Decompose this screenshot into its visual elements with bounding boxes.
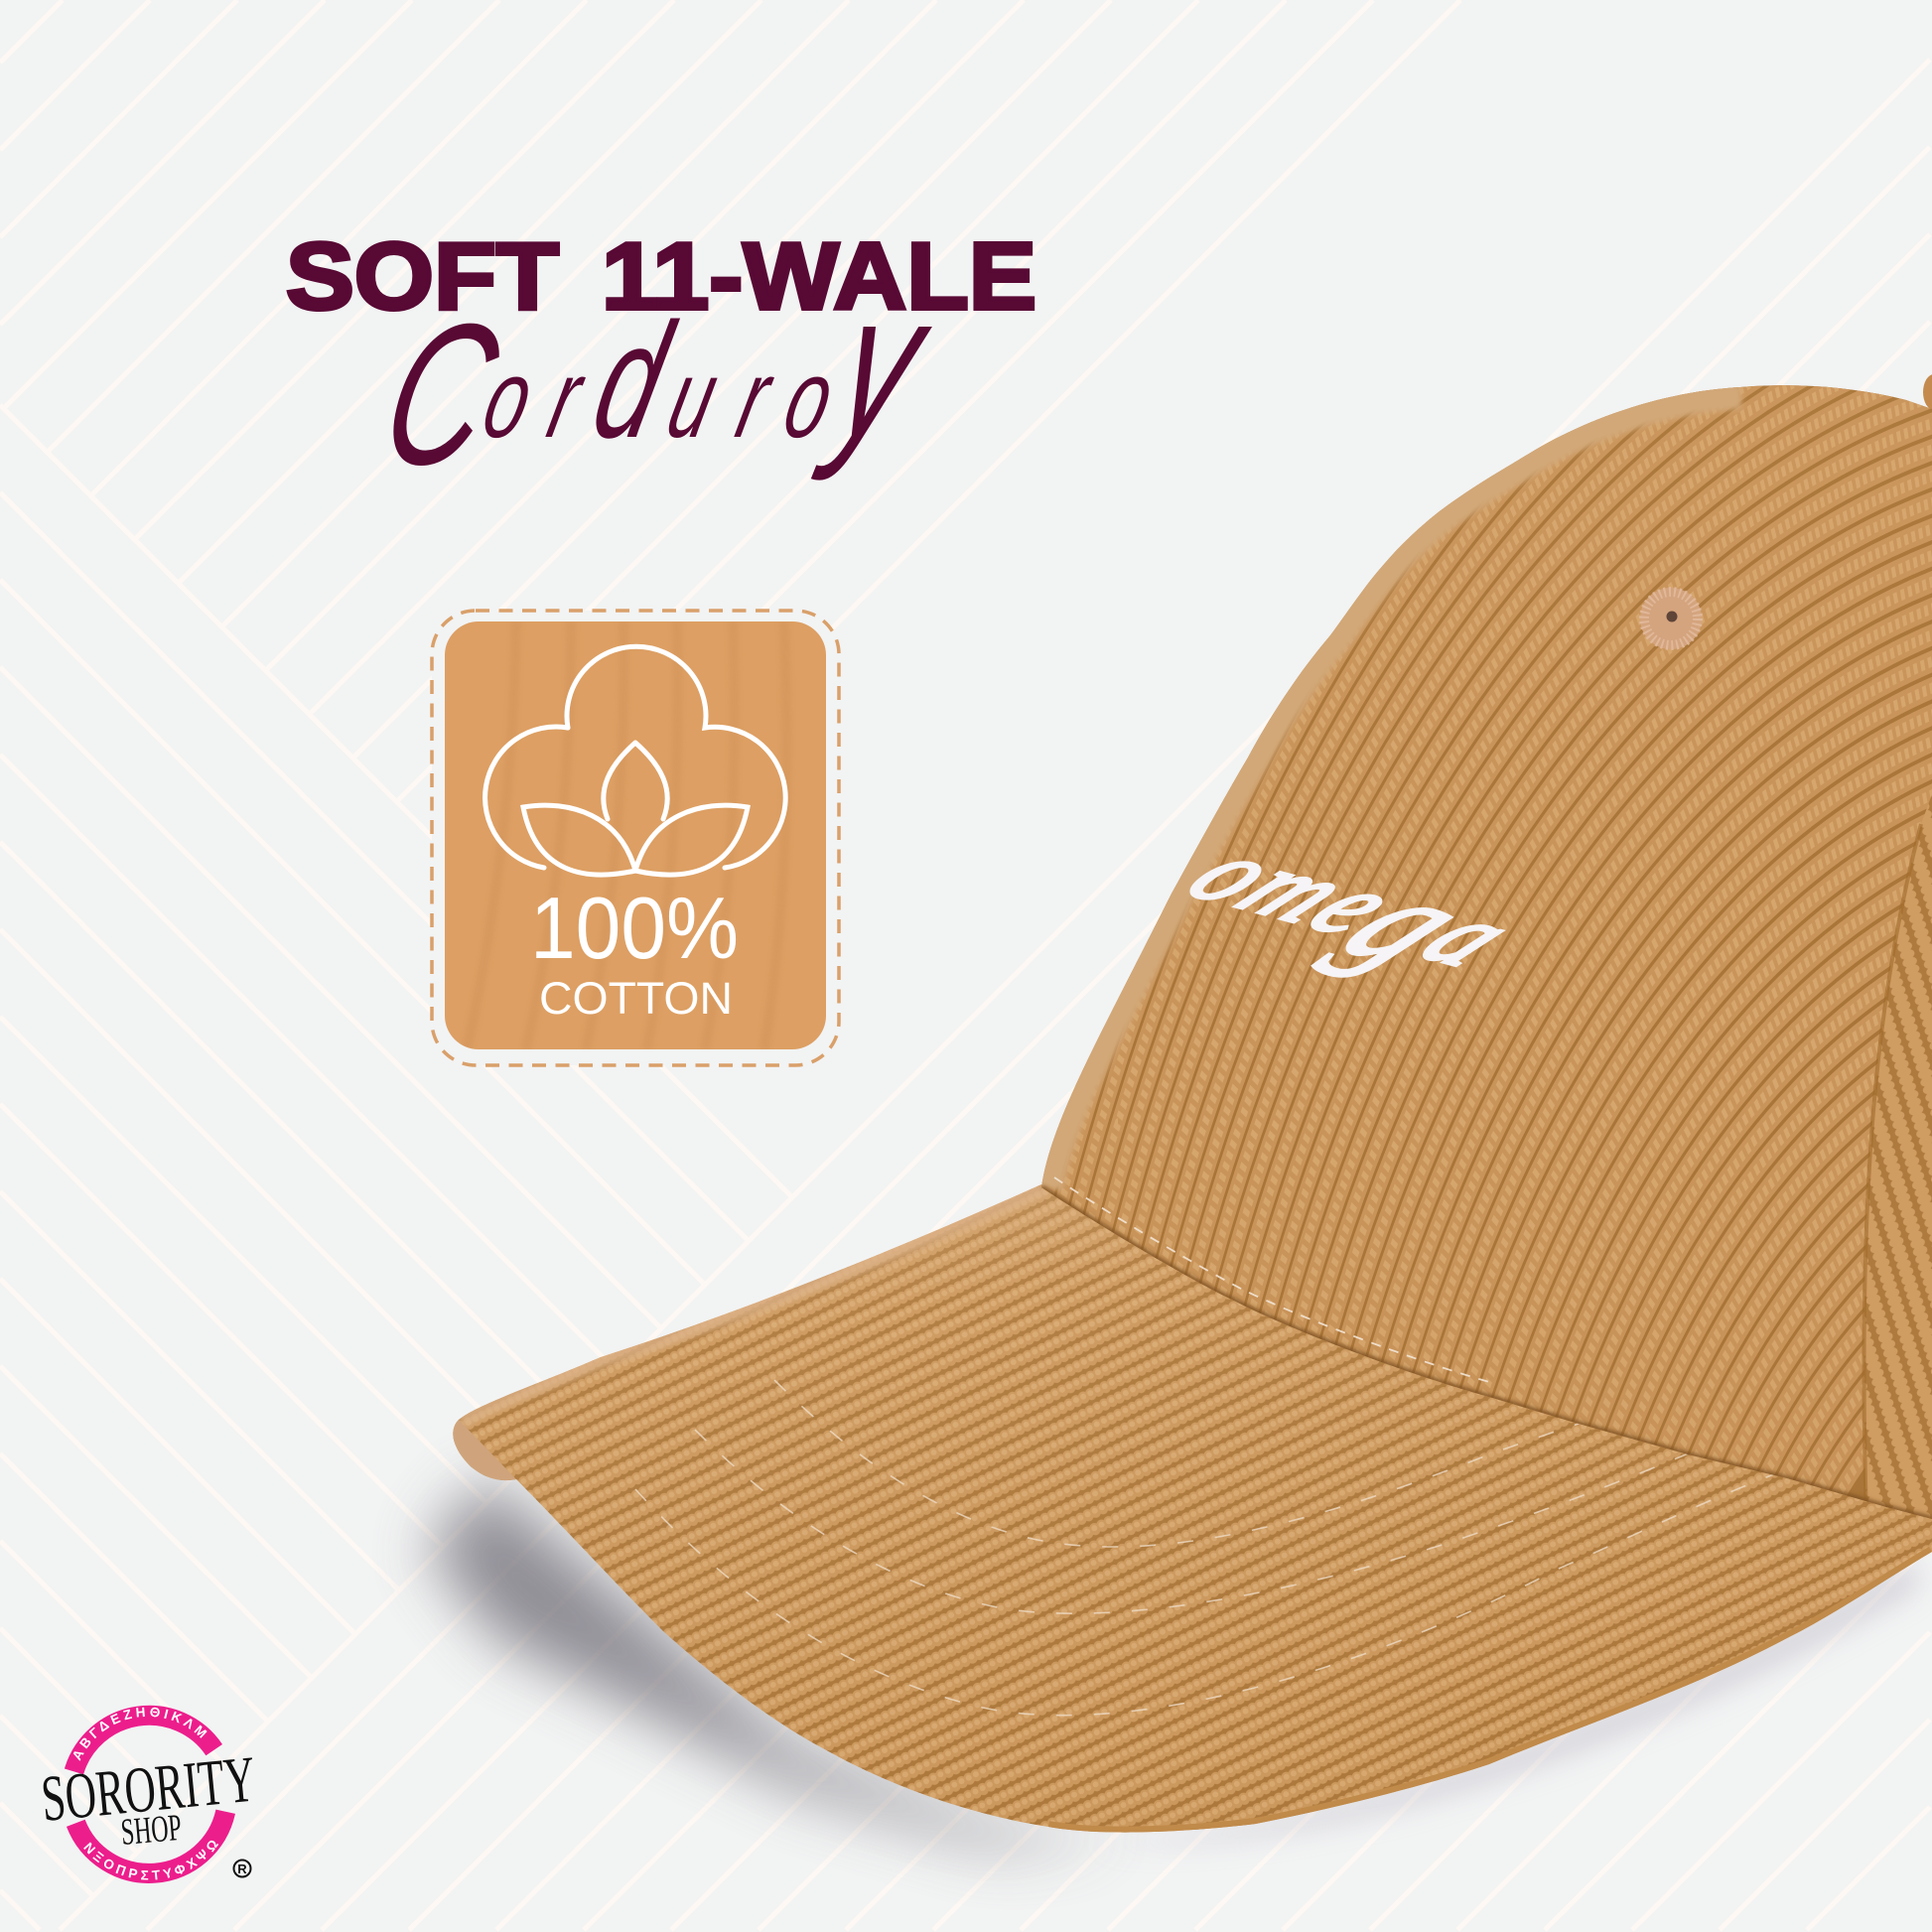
logo lower arc	[75, 1812, 225, 1873]
badge dashed border	[432, 611, 839, 1065]
title word: soft: SOFT	[286, 223, 559, 330]
hat brim	[437, 1172, 1932, 1847]
title: corduroy script: y	[810, 248, 952, 482]
logo wordmark: shop: SHOP	[119, 1807, 184, 1854]
hat crown	[1041, 385, 1932, 1519]
title: corduroy script: C	[365, 283, 517, 507]
hat button	[1923, 374, 1932, 410]
crown stitching	[1054, 1177, 1489, 1382]
title: corduroy script: o	[773, 336, 845, 461]
logo upper arc	[73, 1716, 214, 1771]
badge text: cotton: COTTON	[539, 973, 733, 1024]
badge text: 100%: 100%	[530, 879, 739, 977]
title: corduroy script: r	[727, 336, 784, 461]
logo registered mark: R	[237, 1862, 247, 1876]
title: corduroy script: o	[473, 336, 544, 461]
embroidered omega lettering: g	[1309, 858, 1513, 987]
title: corduroy script: u	[657, 336, 729, 461]
embroidered omega lettering: a	[1396, 890, 1548, 985]
crown side panel	[1864, 794, 1932, 1518]
logo greek letters lower: ΝΞΟΠΡΣΤΥΦΧΨΩ	[83, 1841, 218, 1880]
embroidered omega lettering: ome	[1161, 826, 1430, 953]
icon: cotton boll	[485, 646, 785, 875]
title: corduroy script: d	[579, 290, 687, 473]
crown seam ridge	[1041, 1187, 1932, 1519]
suede crown edge	[1041, 387, 1740, 1187]
title word: 11-wale: 11-WALE	[602, 223, 1036, 330]
cotton badge	[432, 611, 839, 1065]
logo wordmark: sorority: SORORITY	[38, 1743, 258, 1836]
hat shadow	[427, 1479, 1916, 1847]
sorority shop logo	[38, 1706, 258, 1883]
title: corduroy script: r	[538, 336, 596, 461]
crown eyelet	[1640, 588, 1702, 649]
logo registered mark	[234, 1861, 250, 1876]
hat	[437, 0, 1932, 1932]
badge fabric panel	[445, 621, 826, 1049]
title: soft 11-wale	[286, 223, 1036, 330]
logo greek letters upper: ΑΒΓΔΕΖΗΘΙΚΛΜ	[73, 1708, 207, 1761]
